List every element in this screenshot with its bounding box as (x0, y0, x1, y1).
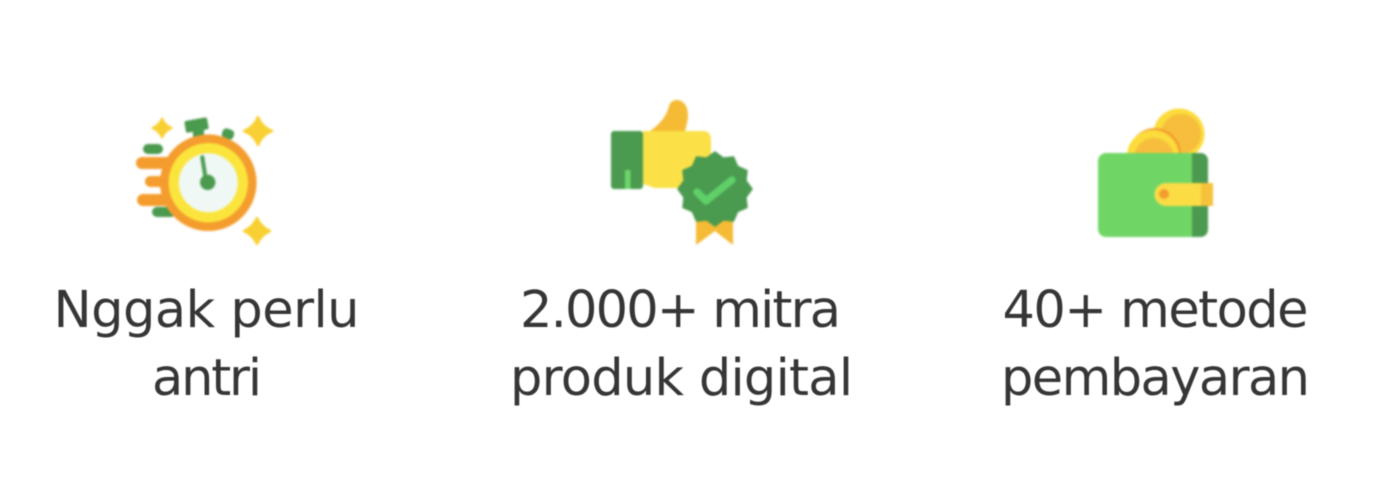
label: Nggak perlu antri: antri (152, 349, 262, 408)
label: 40+ metode pembayaran: pembayaran (1001, 349, 1310, 408)
label: 2.000+ mitra produk digital: 2.000+ mitra (520, 281, 841, 340)
label: 40+ metode pembayaran (1001, 281, 1310, 408)
icon: stopwatch (136, 117, 272, 244)
feature: payment methods (1001, 108, 1310, 408)
label: Nggak perlu antri (54, 281, 360, 408)
icon: thumbs up with badge (611, 100, 752, 245)
icon: wallet with coins (1098, 108, 1213, 237)
feature: no queue (54, 117, 360, 408)
feature: digital partners (510, 100, 853, 408)
label: 40+ metode pembayaran: 40+ metode (1002, 281, 1308, 340)
label: 2.000+ mitra produk digital (510, 281, 853, 408)
label: 2.000+ mitra produk digital: produk digital (510, 349, 853, 408)
label: Nggak perlu antri: Nggak perlu (54, 281, 360, 340)
